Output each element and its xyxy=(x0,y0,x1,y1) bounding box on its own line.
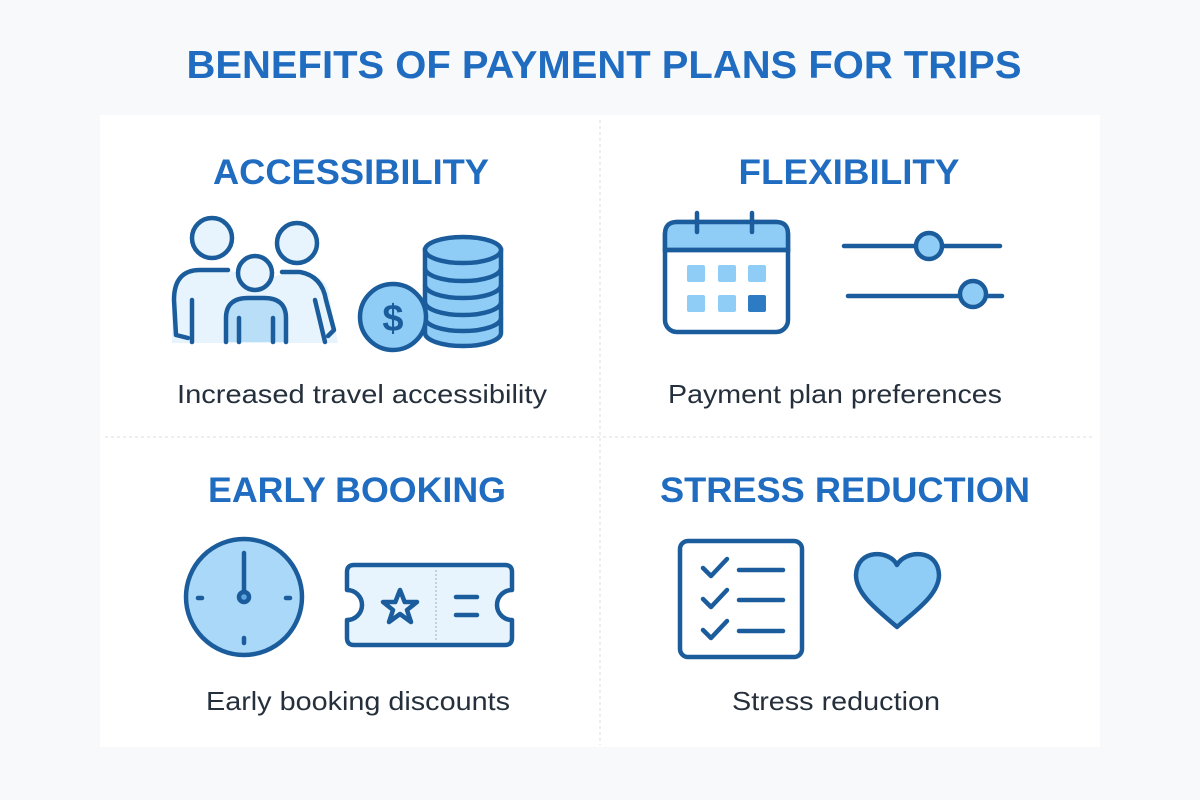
heading: accessibility: ACCESSIBILITY xyxy=(213,153,489,192)
icon: family xyxy=(172,218,338,343)
icon: coins xyxy=(360,237,501,350)
caption: flexibility: Payment plan preferences xyxy=(668,379,1002,409)
caption: stress reduction: Stress reduction xyxy=(732,686,940,716)
icon: checklist xyxy=(680,541,802,657)
icon: calendar xyxy=(665,213,788,332)
icon: clock xyxy=(186,539,302,655)
icon: dollar sign: $ xyxy=(382,298,404,340)
icon: ticket xyxy=(347,565,512,645)
heading: flexibility: FLEXIBILITY xyxy=(738,153,960,192)
heading: early booking: EARLY BOOKING xyxy=(208,471,506,510)
panel: stress reduction xyxy=(660,471,1030,716)
heading: stress reduction: STRESS REDUCTION xyxy=(660,471,1030,510)
panel: flexibility xyxy=(665,153,1002,409)
icon: heart xyxy=(856,554,939,627)
caption: accessibility: Increased travel accessibility xyxy=(177,379,547,409)
icon: sliders xyxy=(844,233,1002,307)
caption: early booking: Early booking discounts xyxy=(206,686,510,716)
panel: background card xyxy=(100,115,1100,747)
panel: early booking xyxy=(186,471,512,716)
panel: accessibility xyxy=(172,153,547,409)
title: BENEFITS OF PAYMENT PLANS FOR TRIPS xyxy=(186,44,1021,87)
